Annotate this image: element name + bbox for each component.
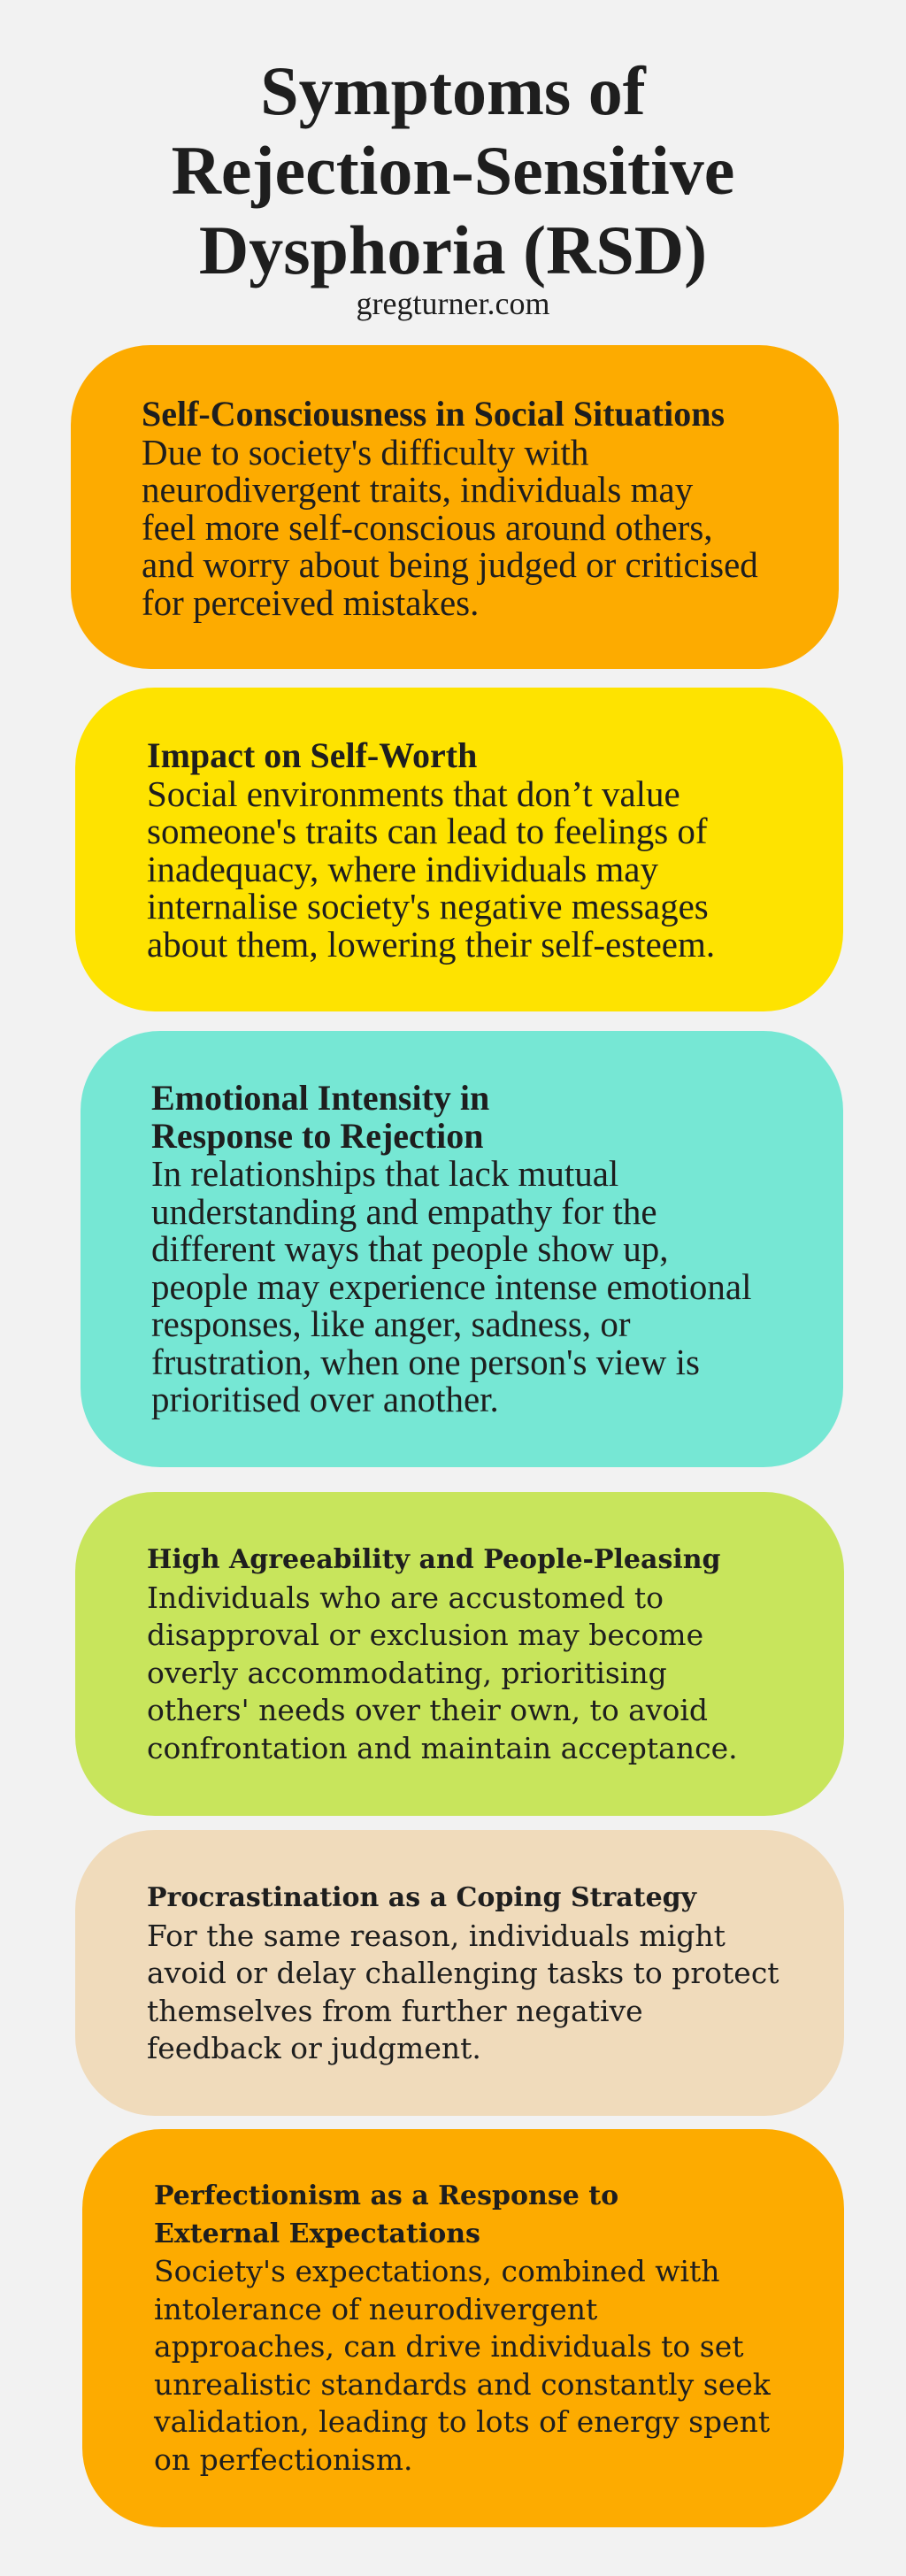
text: perfectionism: approaches, can drive individuals to set bbox=[154, 2329, 743, 2364]
text: emotional intensity: Emotional Intensity in bbox=[151, 1078, 489, 1118]
text: procrastination: Procrastination as a Coping Strategy bbox=[147, 1882, 696, 1913]
text: agreeableness: confrontation and maintain acceptance. bbox=[147, 1731, 738, 1765]
text: perfectionism: intolerance of neurodivergent bbox=[154, 2292, 597, 2326]
text: agreeableness bbox=[147, 1544, 738, 1765]
text: procrastination: themselves from further negative bbox=[147, 1993, 643, 2028]
text: perfectionism: Society's expectations, combined with bbox=[154, 2254, 720, 2288]
panel: agreeableness bbox=[75, 1492, 844, 1816]
text: self-consciousness: Self-Consciousness in Social Situations bbox=[142, 394, 725, 434]
text: emotional intensity: In relationships that lack mutual bbox=[151, 1153, 618, 1194]
text: emotional intensity: prioritised over another. bbox=[151, 1379, 499, 1419]
text: agreeableness: Individuals who are accustomed to bbox=[147, 1580, 664, 1614]
text: agreeableness: disapproval or exclusion may become bbox=[147, 1618, 703, 1652]
text: self-worth: Impact on Self-Worth bbox=[147, 735, 477, 775]
text: self-consciousness: Due to society's difficulty with bbox=[142, 432, 588, 473]
text: emotional intensity: understanding and empathy for the bbox=[151, 1191, 657, 1232]
text: self-worth: Social environments that don’t value bbox=[147, 773, 680, 814]
text: self-worth bbox=[147, 735, 715, 965]
subtitle: gregturner.com bbox=[357, 286, 549, 321]
text: self-worth: inadequacy, where individuals may bbox=[147, 848, 658, 888]
title bbox=[172, 52, 734, 288]
text: emotional intensity: different ways that people show up, bbox=[151, 1228, 669, 1269]
text: self-worth: about them, lowering their self-esteem. bbox=[147, 924, 715, 965]
text: procrastination: avoid or delay challenging tasks to protect bbox=[147, 1956, 779, 1990]
title: Rejection-Sensitive bbox=[172, 132, 734, 209]
text: perfectionism: unrealistic standards and constantly seek bbox=[154, 2366, 771, 2402]
text: agreeableness: others' needs over their own, to avoid bbox=[147, 1693, 708, 1727]
panel: perfectionism bbox=[82, 2129, 844, 2527]
text: perfectionism: on perfectionism. bbox=[154, 2442, 412, 2476]
panel: self-worth bbox=[75, 688, 843, 1011]
text: self-worth: internalise society's negative messages bbox=[147, 886, 709, 927]
text: self-consciousness: feel more self-conscious around others, bbox=[142, 506, 713, 547]
title: Symptoms of bbox=[260, 52, 646, 129]
text: emotional intensity: responses, like anger, sadness, or bbox=[151, 1303, 630, 1344]
text: agreeableness: High Agreeability and People-Pleasing bbox=[147, 1544, 721, 1575]
text: perfectionism: Perfectionism as a Response to bbox=[154, 2180, 618, 2211]
panel: emotional intensity bbox=[81, 1031, 843, 1467]
text: perfectionism: validation, leading to lots of energy spent bbox=[154, 2404, 770, 2439]
text: procrastination: feedback or judgment. bbox=[147, 2031, 481, 2065]
text: emotional intensity bbox=[151, 1078, 752, 1419]
panel: procrastination bbox=[75, 1830, 844, 2116]
text: emotional intensity: Response to Rejection bbox=[151, 1115, 483, 1156]
text: self-consciousness: for perceived mistakes. bbox=[142, 582, 479, 623]
panel: self-consciousness bbox=[71, 345, 839, 669]
text: self-worth: someone's traits can lead to feelings of bbox=[147, 811, 708, 851]
text: self-consciousness: and worry about being judged or criticised bbox=[142, 544, 758, 585]
title: Dysphoria (RSD) bbox=[199, 211, 707, 288]
text: perfectionism bbox=[154, 2180, 771, 2476]
text: procrastination bbox=[147, 1882, 779, 2065]
text: self-consciousness: neurodivergent traits, individuals may bbox=[142, 469, 693, 510]
text: agreeableness: overly accommodating, prioritising bbox=[147, 1655, 667, 1690]
text: emotional intensity: people may experience intense emotional bbox=[151, 1265, 752, 1306]
text: emotional intensity: frustration, when one person's view is bbox=[151, 1342, 700, 1382]
text: self-consciousness bbox=[142, 394, 758, 623]
text: perfectionism: External Expectations bbox=[154, 2218, 480, 2249]
text: procrastination: For the same reason, individuals might bbox=[147, 1919, 726, 1952]
